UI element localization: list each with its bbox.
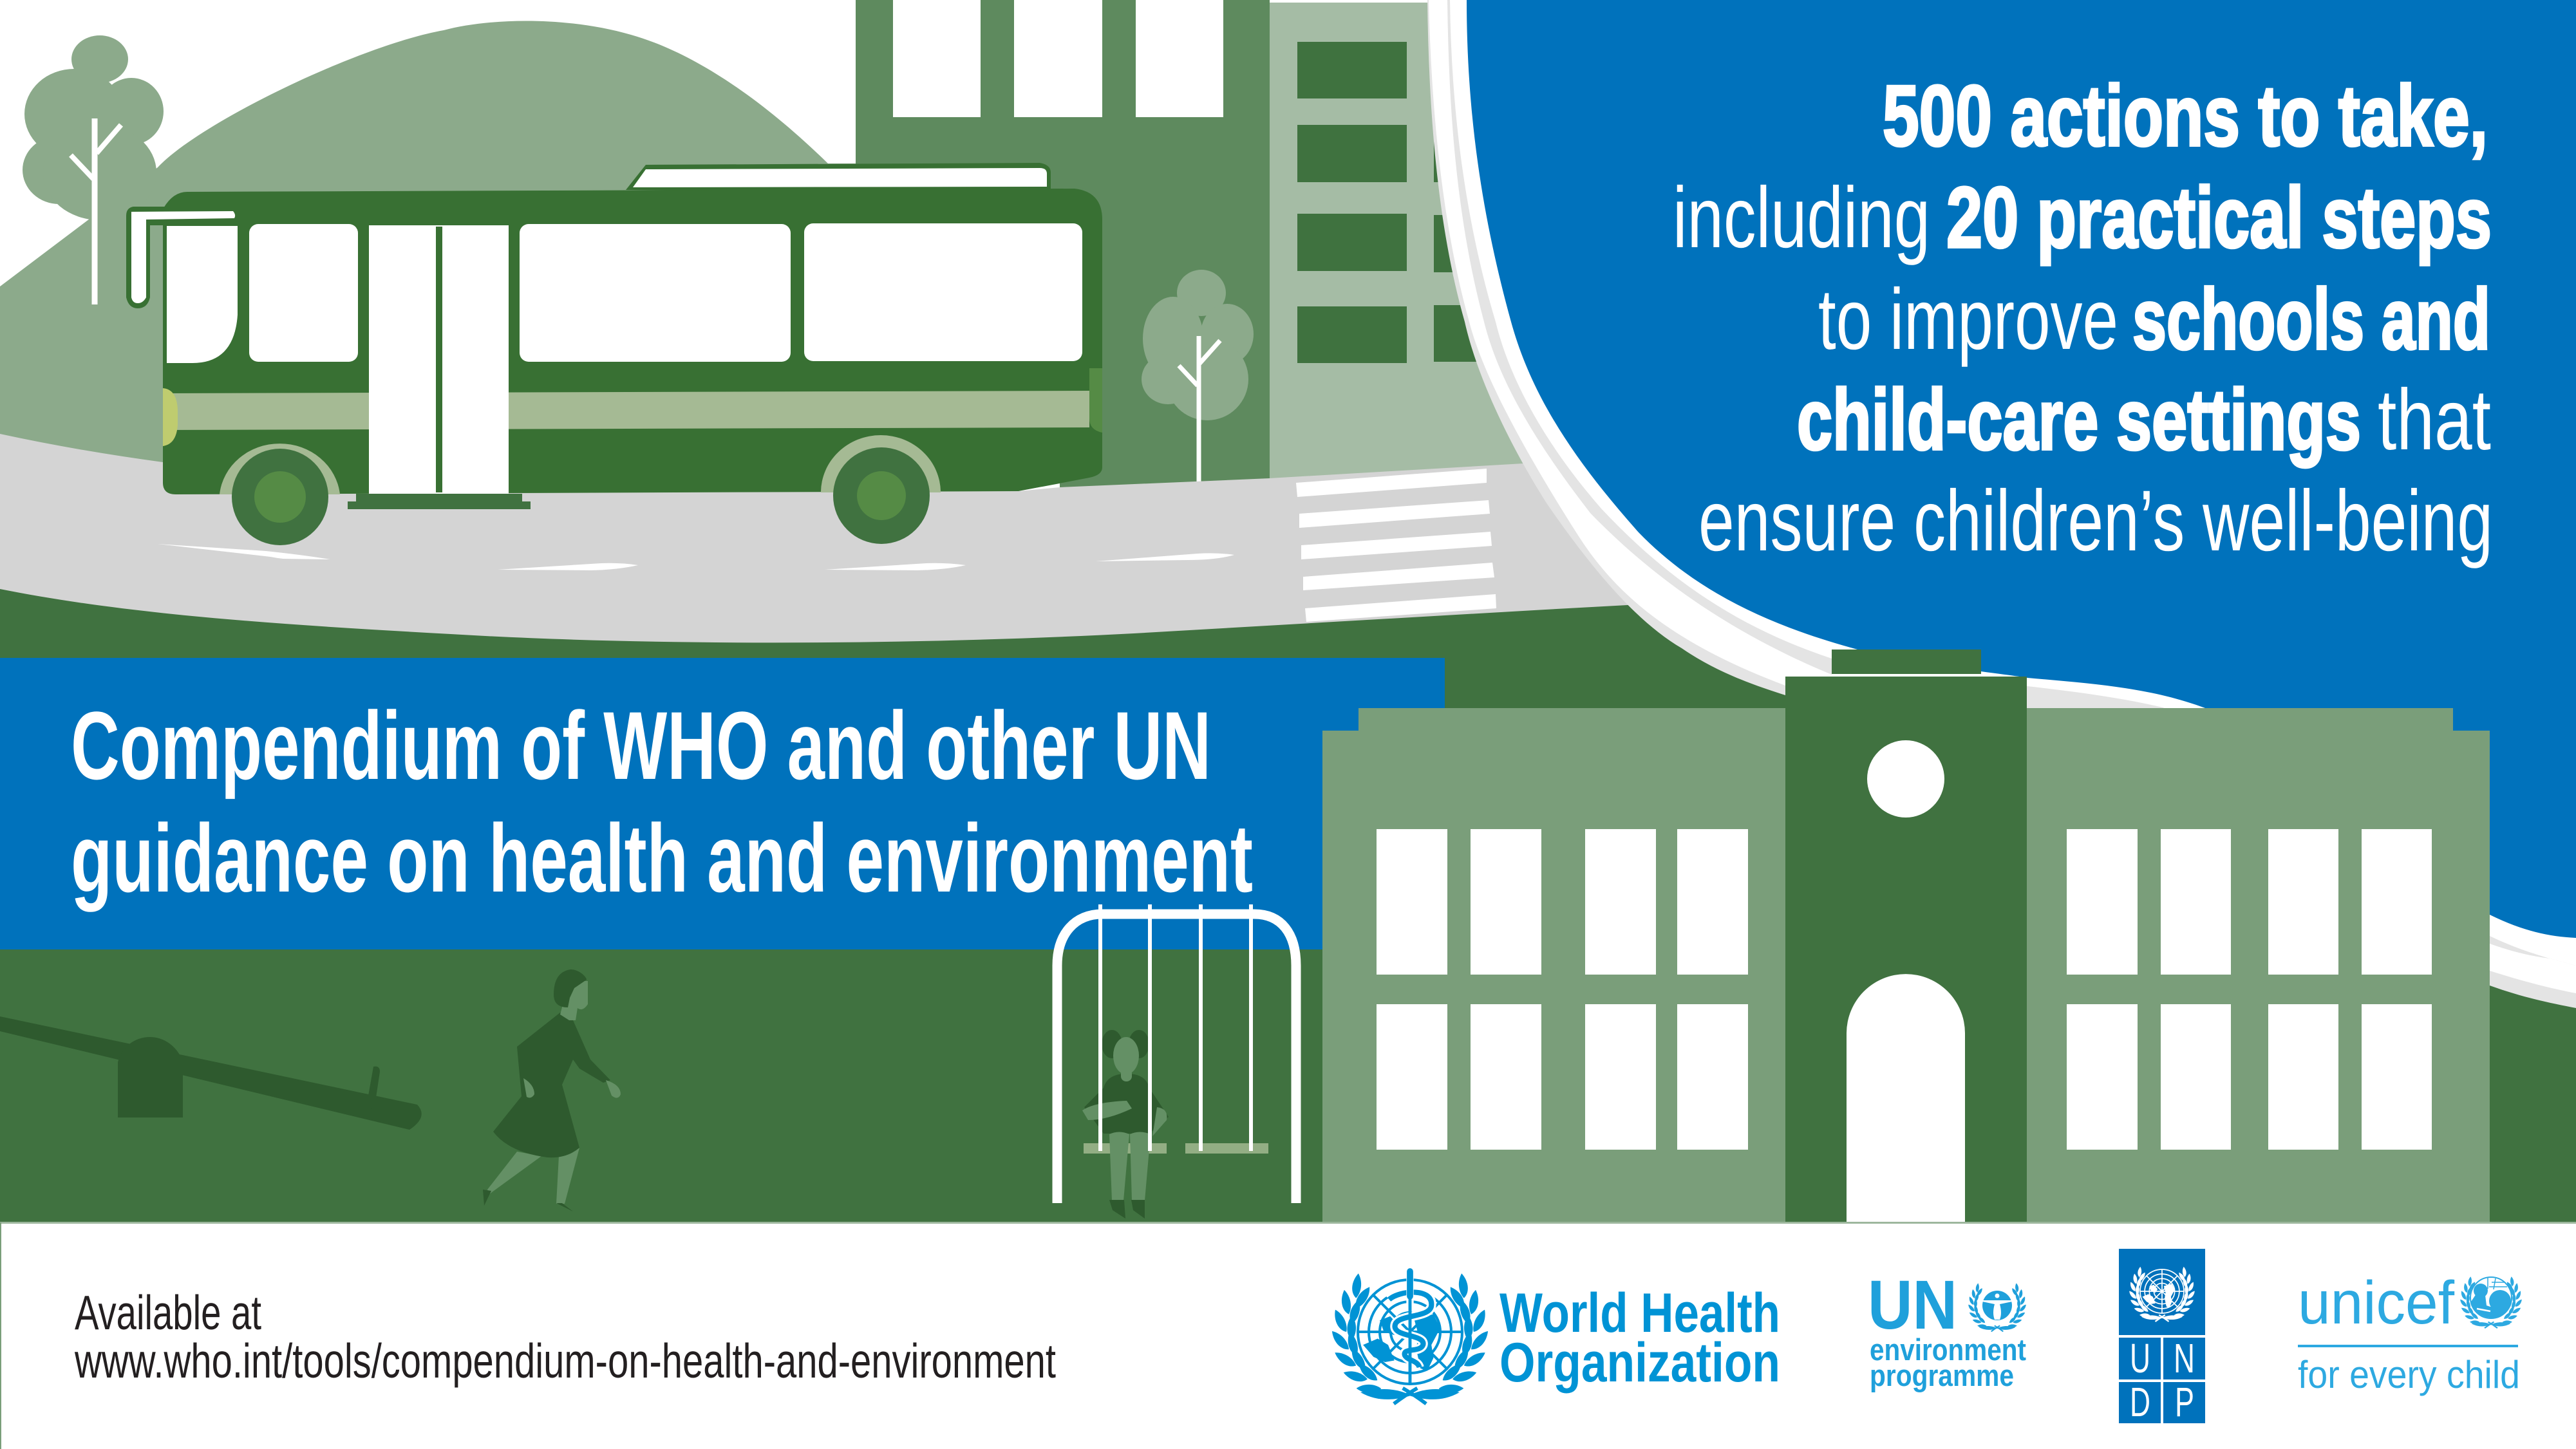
UNEP wordmark — [1870, 1332, 2026, 1392]
bus roof hatch — [626, 163, 1051, 193]
crosswalk — [1296, 469, 1496, 622]
hill — [0, 21, 863, 502]
bus mirror — [126, 207, 235, 308]
curved road border stripes — [1427, 0, 2576, 1008]
tree right — [1142, 270, 1254, 485]
availability text — [74, 1285, 1056, 1388]
woman skin — [523, 981, 621, 1098]
WHO wordmark: Organization — [1500, 1332, 1780, 1394]
swing seats — [1084, 1143, 1268, 1154]
UNDP letter tiles: D — [2130, 1379, 2150, 1425]
girl on swing — [1082, 1030, 1169, 1219]
building: dark green — [856, 0, 1270, 502]
blue panel — [1467, 0, 2576, 938]
UNDP letter tiles: N — [2174, 1335, 2195, 1381]
bus front wheel — [220, 444, 340, 545]
bus headlight — [163, 388, 178, 446]
UNEP wordmark: programme — [1870, 1358, 2014, 1392]
school tower — [1785, 650, 2027, 1222]
headline: 500 actions — [1673, 68, 2493, 569]
WHO wordmark: World Health — [1500, 1282, 1780, 1344]
headline: 500 actions: child-care settings — [1797, 372, 2361, 468]
road — [0, 434, 1687, 642]
swing chains — [1098, 904, 1253, 1151]
WHO wordmark — [1500, 1282, 1780, 1394]
logo: unicef: for every child — [2298, 1353, 2520, 1396]
bus tail light — [1089, 368, 1102, 433]
ground — [0, 579, 2576, 1222]
swing set — [1057, 904, 1296, 1219]
UNEP wordmark: environment — [1870, 1332, 2026, 1367]
headline: 500 actions: to improve — [1818, 272, 2118, 368]
swing frame — [1057, 914, 1296, 1203]
WHO emblem — [1330, 1268, 1490, 1404]
tree left — [23, 35, 164, 304]
UNDP emblem — [2129, 1267, 2195, 1322]
logo: World Health Organization — [1330, 1268, 1780, 1404]
building: light green — [1270, 3, 1559, 502]
bus underside highlight — [1019, 483, 1060, 491]
UNDP letter tiles — [2119, 1335, 2205, 1425]
unicef rule — [2298, 1345, 2518, 1347]
bus — [126, 163, 1102, 545]
school wings — [1322, 708, 2490, 1222]
school — [1322, 650, 2490, 1222]
title band — [0, 658, 1445, 949]
woman running — [483, 969, 621, 1211]
headline: 500 actions: that — [2378, 372, 2491, 468]
seesaw — [0, 1016, 422, 1130]
logo: unicef — [2298, 1269, 2523, 1396]
UNDP letter tiles: P — [2175, 1379, 2194, 1425]
logo: UN environment programme: UN — [1868, 1266, 1957, 1343]
woman hair — [554, 969, 587, 1007]
school windows — [1377, 829, 2432, 1150]
bus rear wheel — [821, 435, 941, 544]
logo: UNDP — [2119, 1249, 2205, 1425]
bus body — [163, 189, 1102, 494]
UNDP letter tiles: U — [2130, 1335, 2150, 1381]
title — [71, 691, 1253, 912]
bus door — [348, 225, 531, 509]
availability text: www.who.int/tools/compendium-on-health-and-environment — [74, 1334, 1056, 1388]
road markings — [158, 544, 1234, 570]
logo: unicef: unicef — [2298, 1269, 2455, 1337]
footer strip — [0, 1222, 2576, 1449]
title: guidance on health and environment — [71, 804, 1253, 912]
UNEP emblem — [1968, 1283, 2027, 1331]
headline: 500 actions: including — [1673, 170, 1930, 266]
availability text: Available at — [75, 1285, 261, 1340]
title: Compendium of WHO and other UN — [71, 691, 1211, 799]
logo: UN environment programme — [1868, 1266, 2027, 1392]
bus stripe — [163, 391, 1089, 430]
woman dress — [483, 1013, 610, 1211]
bus windows — [167, 223, 1082, 363]
woman legs — [487, 1148, 579, 1204]
unicef emblem — [2459, 1276, 2523, 1328]
